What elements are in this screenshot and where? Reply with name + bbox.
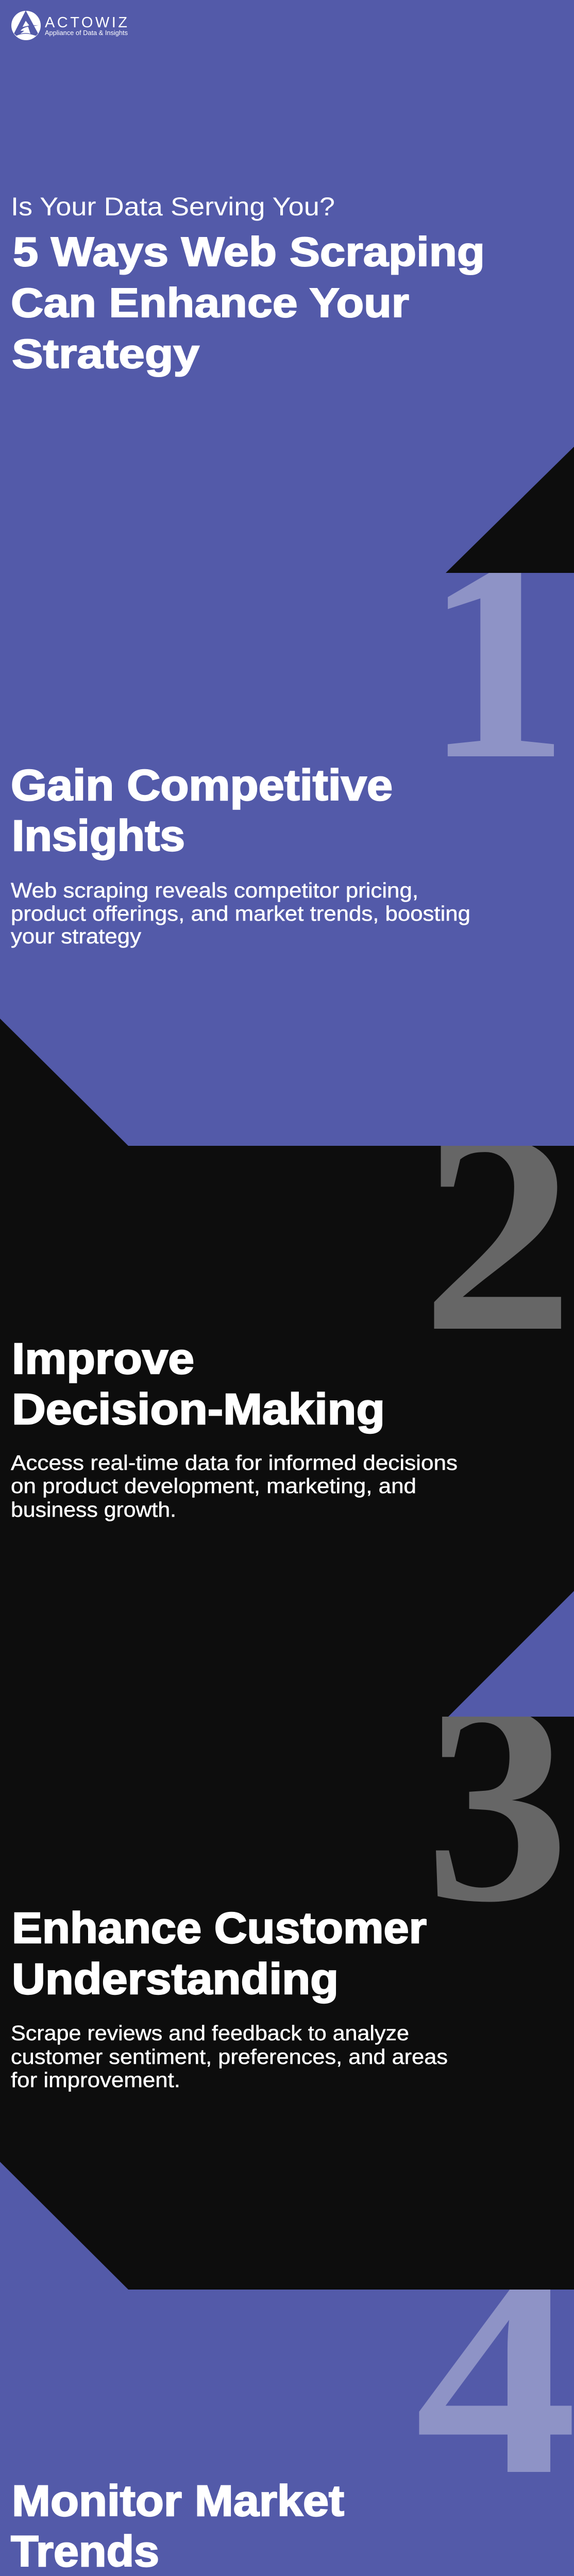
heading: Improve	[12, 1334, 194, 1383]
number 1: 1	[425, 500, 569, 819]
title	[11, 192, 485, 377]
logo: Actowiz white header logo: ACTOWIZ	[45, 14, 127, 31]
description: Access real-time data for informed decisions	[11, 1451, 458, 1475]
logo: Actowiz white header logo: Appliance of Data & Insights	[45, 29, 128, 37]
description: business growth.	[11, 1498, 176, 1521]
number 2: 2	[421, 1072, 574, 1391]
main heading	[11, 229, 485, 377]
triangle: section 2 bottom right	[448, 1591, 574, 1717]
main heading: 5 Ways Web Scraping	[13, 229, 485, 275]
heading: Insights	[12, 811, 185, 860]
panel: monitor market trends background	[0, 2290, 574, 2576]
heading	[12, 1904, 427, 2003]
triangle: section 1 bottom left	[0, 1019, 128, 1146]
description: product offerings, and market trends, boosting	[11, 902, 470, 925]
heading: Enhance Customer	[12, 1904, 427, 1952]
heading	[11, 761, 393, 860]
section 3 text: enhance customer understanding	[11, 1904, 448, 2092]
description	[11, 1451, 458, 1521]
description	[11, 878, 470, 948]
section 4 text: monitor market trends	[10, 2477, 440, 2576]
main heading: Strategy	[12, 331, 200, 377]
heading	[12, 1334, 385, 1433]
heading	[11, 2477, 344, 2575]
description	[11, 2021, 448, 2092]
triangle: section 3 bottom left	[0, 2162, 128, 2290]
number 3: 3	[425, 1642, 569, 1962]
description: Scrape reviews and feedback to analyze	[11, 2021, 409, 2045]
heading: Understanding	[12, 1955, 339, 2003]
logo: Actowiz white header logo	[11, 10, 128, 40]
number 4: 4	[415, 2215, 574, 2535]
section 2 text: improve decision-making	[11, 1334, 458, 1521]
panel: intro and competitive insights background	[0, 0, 574, 1146]
description: Web scraping reveals competitor pricing,	[11, 878, 418, 902]
description: for improvement.	[11, 2068, 180, 2092]
triangle: section 1 top right	[446, 447, 574, 573]
subtitle: Is Your Data Serving You?	[11, 192, 335, 221]
main heading: Can Enhance Your	[11, 280, 409, 326]
panel: enhance customer understanding background	[0, 1717, 574, 2290]
description: customer sentiment, preferences, and areas	[11, 2045, 448, 2069]
panel: improve decision-making background	[0, 1146, 574, 1717]
section 1 text: gain competitive insights	[11, 761, 470, 948]
description: your strategy	[11, 924, 142, 948]
heading: Gain Competitive	[11, 761, 393, 809]
heading: Trends	[11, 2527, 159, 2575]
description: on product development, marketing, and	[11, 1474, 416, 1498]
heading: Decision-Making	[12, 1385, 385, 1433]
icon: Actowiz emblem white	[11, 10, 41, 40]
heading: Monitor Market	[12, 2477, 344, 2525]
